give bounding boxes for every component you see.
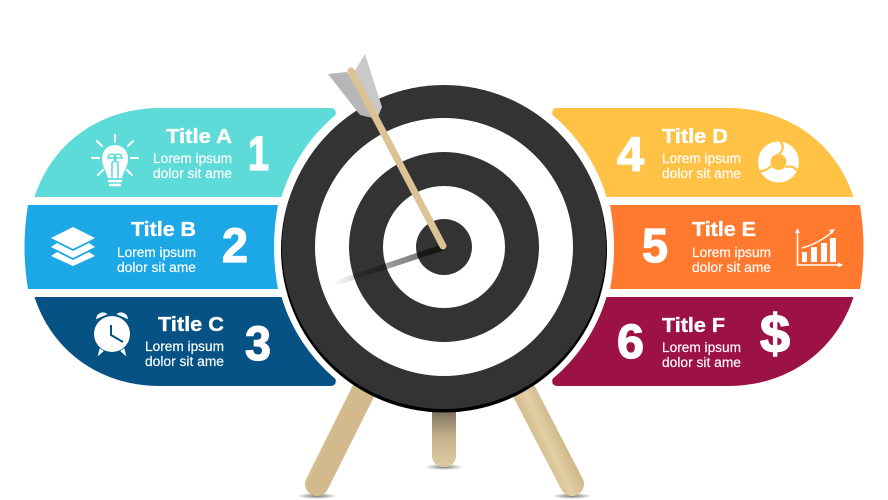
heading: Title F: Title F: [662, 315, 725, 337]
icon: bar chart: [795, 228, 843, 268]
heading: Title E: Title E: [692, 219, 756, 241]
panel: Title C: [34, 297, 336, 386]
heading: Title B: Title B: [131, 219, 196, 241]
number 2: 2: [222, 220, 248, 273]
number 3: 3: [245, 318, 271, 371]
number 5: 5: [642, 220, 668, 273]
text: Title B body line 2: dolor sit ame: [117, 260, 196, 275]
panel: Title F: [552, 297, 854, 386]
text: Title C body: Lorem ipsum: [145, 339, 224, 354]
text: Title F body: Lorem ipsum: [662, 340, 741, 355]
heading: Title D: Title D: [662, 126, 728, 148]
panel: Title E: [610, 205, 864, 289]
number 4: 4: [617, 129, 644, 182]
text: Title D body: Lorem ipsum: [662, 151, 741, 166]
text: Title D body line 2: dolor sit ame: [662, 166, 741, 181]
text: Title E body: Lorem ipsum: [692, 245, 771, 260]
icon: cycle: [758, 141, 799, 182]
icon: layers: [51, 227, 95, 266]
text: Title A body: Lorem ipsum: [153, 151, 232, 166]
panel: Title B: [24, 205, 278, 289]
number 6: 6: [617, 316, 644, 369]
text: Title F body line 2: dolor sit ame: [662, 355, 741, 370]
text: Title C body line 2: dolor sit ame: [145, 354, 224, 369]
panel: Title A: [34, 108, 336, 197]
stand legs: [297, 380, 592, 499]
target: [281, 85, 607, 412]
text: Title E body line 2: dolor sit ame: [692, 260, 771, 275]
heading: Title C: Title C: [158, 314, 224, 336]
icon: dollar: $: [760, 304, 790, 364]
arrow shadow: [331, 244, 445, 286]
text: Title B body: Lorem ipsum: [117, 245, 196, 260]
text: Title A body line 2: dolor sit ame: [153, 166, 232, 181]
icon: light bulb: [92, 135, 138, 185]
number 1: 1: [248, 128, 269, 181]
icon: alarm clock: [94, 313, 130, 355]
heading: Title A: Title A: [166, 126, 232, 148]
arrow: [328, 54, 443, 246]
panel: Title D: [552, 108, 854, 197]
